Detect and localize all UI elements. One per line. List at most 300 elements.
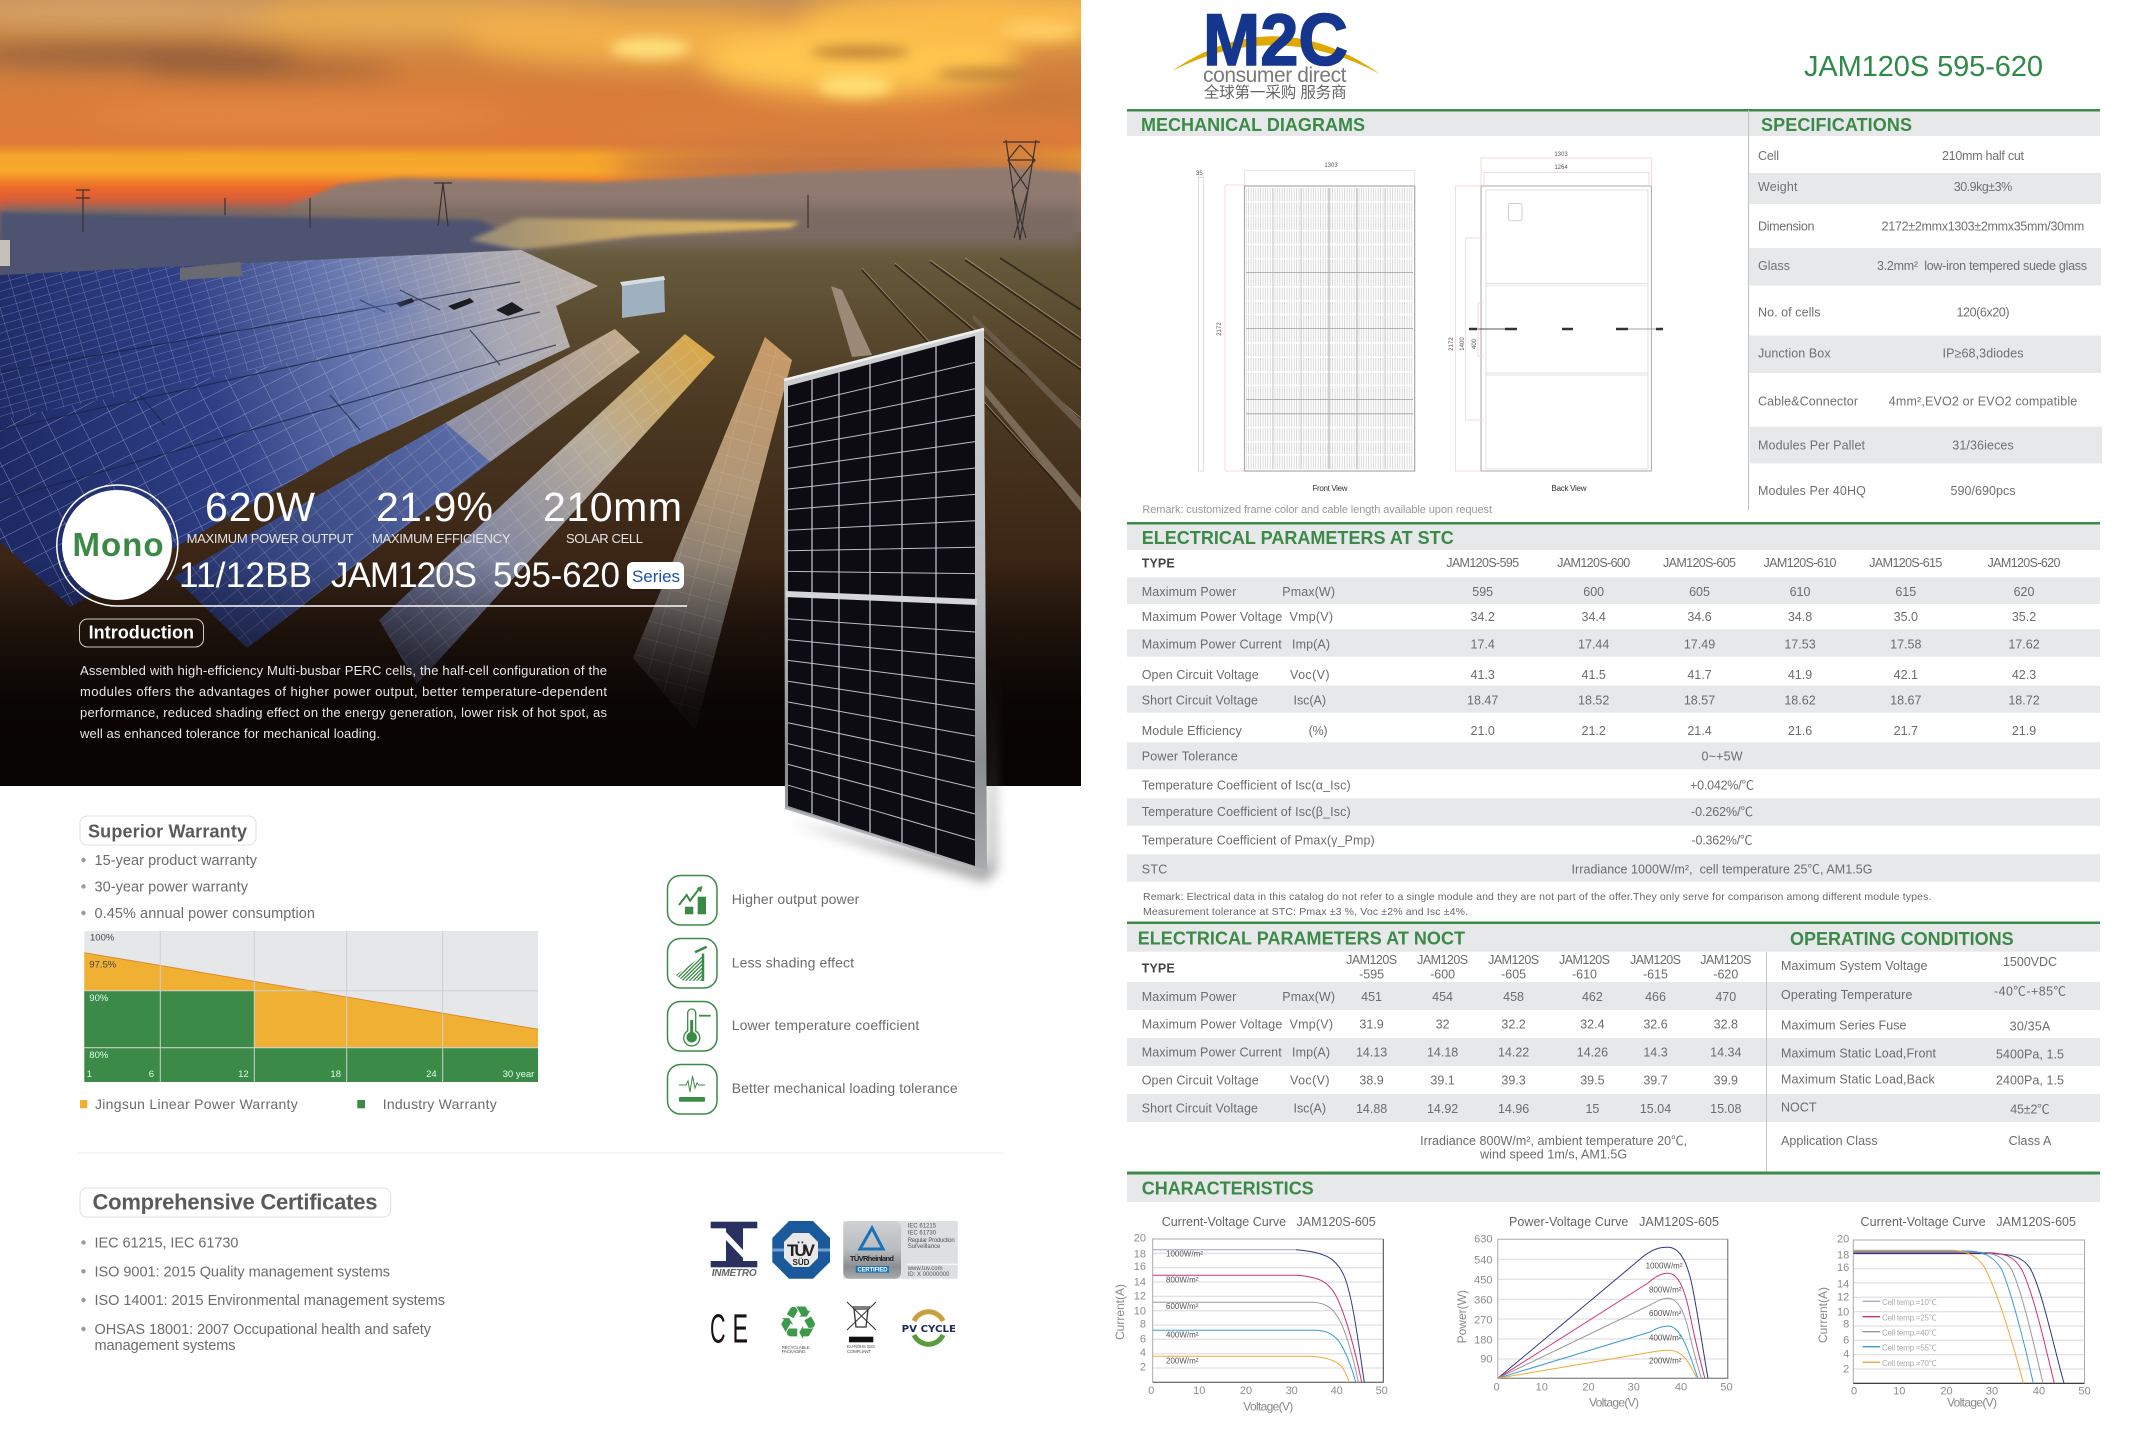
section header: characteristics [1127, 1172, 2100, 1202]
chart: power-voltage curve by irradiance: 450 [1474, 1274, 1492, 1286]
STC short circuit voltage: 18.57 [1684, 693, 1715, 707]
back view drawing [1449, 152, 1663, 493]
section header: electrical parameters at STC [1127, 522, 2100, 550]
specifications table: Glass [1758, 259, 1790, 273]
NOCT type row: -595 [1359, 967, 1384, 981]
chart: current-voltage curve by irradiance: 12 [1134, 1290, 1146, 1302]
specifications table: 4mm²,EVO2 or EVO2 compatible [1889, 394, 2077, 408]
NOCT conditions note: wind speed 1m/s, AM1.5G [1479, 1147, 1627, 1161]
STC short circuit voltage [1127, 686, 2100, 713]
NOCT short circuit voltage: Isc(A) [1294, 1102, 1326, 1116]
chart: current-voltage curve by irradiance [1113, 1215, 1388, 1414]
NOCT maximum power: 458 [1503, 990, 1524, 1004]
NOCT type row: -610 [1572, 967, 1597, 981]
STC power tolerance [1127, 742, 2100, 769]
section header: mechanical diagrams [1127, 109, 2100, 136]
chart: current-voltage curve by irradiance: 400W/m² [1166, 1330, 1199, 1339]
certificate bullets: ISO 14001: 2015 Environmental management systems [94, 1293, 445, 1309]
STC maximum power current: Maximum Power Current [1142, 637, 1282, 651]
NOCT maximum power current: Imp(A) [1292, 1046, 1330, 1060]
chart: current-voltage curve by irradiance: 14 [1134, 1276, 1146, 1288]
STC open circuit voltage: 42.3 [2012, 668, 2036, 682]
STC short circuit voltage: 18.52 [1578, 693, 1609, 707]
introduction text: modules offers the advantages of higher power output, better temperature-dependent [80, 684, 607, 699]
warranty area chart: 24 [426, 1069, 437, 1080]
chart: current-voltage curve by cell temperature [1816, 1215, 2091, 1410]
STC maximum power voltage [1142, 610, 2036, 624]
NOCT maximum power voltage: Vmp(V) [1290, 1018, 1333, 1032]
specifications table [1749, 149, 2102, 498]
chart: current-voltage curve by cell temperature: Cell temp.=10℃ [1882, 1298, 1937, 1307]
back view drawing: Back View [1552, 484, 1587, 493]
section header: electrical parameters at NOCT and operating conditions: OPERATING CONDITIONS [1790, 929, 2014, 949]
NOCT open circuit voltage: 39.9 [1714, 1073, 1738, 1087]
STC short circuit voltage: 18.62 [1784, 693, 1816, 707]
specifications table: 2172±2mmx1303±2mmx35mm/30mm [1882, 220, 2084, 234]
STC maximum power current: 17.44 [1578, 637, 1609, 651]
warranty area chart: 100% [90, 933, 115, 944]
NOCT maximum power voltage: 32.4 [1580, 1018, 1605, 1032]
operating conditions table: NOCT [1781, 1101, 1817, 1115]
STC module efficiency: 21.4 [1687, 724, 1712, 738]
chart: current-voltage curve by cell temperature: 30 [1986, 1385, 1998, 1397]
STC maximum power: 615 [1895, 585, 1916, 599]
NOCT open circuit voltage: Voc(V) [1290, 1073, 1330, 1087]
chart: current-voltage curve by irradiance: Current-Voltage Curve JAM120S-605 [1162, 1215, 1376, 1229]
back view drawing: 2172 [1449, 337, 1455, 351]
superior warranty heading [80, 816, 256, 845]
chart: current-voltage curve by cell temperature: Cell temp.=40℃ [1882, 1328, 1937, 1338]
introduction text: performance, reduced shading effect on the energy generation, lower risk of hot spot, as [80, 705, 608, 720]
chart: current-voltage curve by cell temperature: 0 [1851, 1385, 1857, 1397]
STC maximum power: 605 [1689, 585, 1710, 599]
key stat: 21.9%: 21.9% [376, 484, 493, 530]
STC short circuit voltage: 18.47 [1467, 693, 1498, 707]
superior warranty heading: Superior Warranty [88, 822, 247, 842]
key stat: 21.9% [372, 484, 511, 546]
STC maximum power: Pmax(W) [1282, 585, 1335, 599]
STC type row: JAM120S-615 [1869, 556, 1942, 570]
specifications table: IP≥68,3diodes [1942, 346, 2024, 360]
chart: current-voltage curve by cell temperature: 14 [1837, 1278, 1849, 1290]
logo: CE mark: C [710, 1306, 726, 1352]
STC temperature coefficient alpha: Temperature Coefficient of Isc(α_Isc) [1142, 778, 1351, 792]
front view drawing: 1303 [1324, 163, 1338, 169]
chart: current-voltage curve by cell temperature: 50 [2078, 1385, 2091, 1397]
front view drawing: 2172 [1217, 322, 1223, 336]
NOCT maximum power current: Maximum Power Current [1142, 1046, 1282, 1060]
logo: PV CYCLE: PV CYCLE [902, 1324, 956, 1335]
logo: recyclable packaging: RECYCLABLE [782, 1345, 810, 1350]
chart: power-voltage curve by irradiance: 10 [1536, 1382, 1548, 1394]
specifications table: 31/36ieces [1952, 439, 2014, 453]
chart: current-voltage curve by irradiance: 4 [1140, 1347, 1146, 1359]
chart: current-voltage curve by cell temperature: Cell temp.=70℃ [1882, 1359, 1937, 1368]
feature: better mechanical loading tolerance: Better mechanical loading tolerance [732, 1080, 958, 1096]
chart legend: Industry Warranty [383, 1096, 497, 1112]
STC temperature coefficient gamma: -0.362%/℃ [1692, 833, 1752, 847]
chart: power-voltage curve by irradiance: 600W/m² [1649, 1309, 1682, 1318]
back view drawing: 400 [1472, 338, 1478, 349]
NOCT type row [1142, 953, 1751, 981]
warranty area chart: 18 [330, 1069, 341, 1080]
front view drawing: 35 [1196, 171, 1203, 177]
chart: current-voltage curve by irradiance: 10 [1193, 1385, 1205, 1397]
STC temperature coefficient gamma [1142, 833, 1752, 847]
section header: characteristics: CHARACTERISTICS [1142, 1178, 1314, 1198]
STC open circuit voltage: 41.5 [1582, 668, 1606, 682]
NOCT short circuit voltage: 14.96 [1498, 1102, 1529, 1116]
certificate bullets [81, 1235, 445, 1354]
logo: TUV Rheinland: www.tuv.com [907, 1266, 943, 1272]
background photo: solar farm at sunset [0, 0, 1160, 786]
STC module efficiency: 21.7 [1894, 724, 1918, 738]
section header: electrical parameters at NOCT and operating conditions [1127, 922, 2100, 952]
key stat: 620W: MAXIMUM POWER OUTPUT [187, 531, 354, 546]
specifications table: Modules Per 40HQ [1758, 484, 1866, 498]
STC maximum power current: 17.62 [2008, 637, 2040, 651]
chart: current-voltage curve by cell temperature: 16 [1837, 1262, 1849, 1274]
operating conditions table: Application Class [1781, 1134, 1878, 1148]
section header: electrical parameters at NOCT and operating conditions: ELECTRICAL PARAMETERS AT NOCT [1138, 928, 1465, 948]
NOCT open circuit voltage: Open Circuit Voltage [1142, 1073, 1259, 1087]
STC maximum power current: 17.49 [1684, 637, 1715, 651]
feature: better mechanical loading tolerance [668, 1064, 958, 1114]
chart: power-voltage curve by irradiance: 540 [1474, 1254, 1492, 1266]
panel shadow [790, 660, 996, 882]
chart: current-voltage curve by irradiance: 1000W/m² [1166, 1250, 1203, 1259]
feature: lower temperature coefficient: Lower temperature coefficient [732, 1017, 919, 1033]
NOCT type row: TYPE [1142, 962, 1175, 976]
series tag: Series [632, 567, 680, 586]
chart: current-voltage curve by irradiance: 800W/m² [1166, 1275, 1199, 1284]
chart legend: Jingsun Linear Power Warranty [95, 1096, 298, 1112]
introduction heading [80, 619, 204, 647]
chart: current-voltage curve by irradiance: Current(A) [1113, 1284, 1127, 1340]
specifications table: No. of cells [1758, 306, 1820, 320]
logo: TUV Rheinland: IEC 61730 [908, 1231, 937, 1237]
chart: power-voltage curve by irradiance: 360 [1474, 1294, 1492, 1306]
operating conditions table: 45±2℃ [2010, 1102, 2050, 1116]
chart: current-voltage curve by irradiance: 2 [1140, 1362, 1146, 1374]
STC type row: JAM120S-595 [1446, 556, 1519, 570]
chart: current-voltage curve by cell temperature: 12 [1837, 1292, 1849, 1304]
logo: INMETRO: INMETRO [712, 1268, 757, 1279]
NOCT short circuit voltage: 14.88 [1356, 1102, 1387, 1116]
STC temperature coefficient beta: Temperature Coefficient of Isc(β_Isc) [1142, 805, 1351, 819]
chart: power-voltage curve by irradiance: 630 [1474, 1234, 1492, 1246]
STC short circuit voltage: Isc(A) [1294, 693, 1326, 707]
STC maximum power current: Imp(A) [1292, 637, 1330, 651]
STC maximum power: 600 [1583, 585, 1604, 599]
STC short circuit voltage: 18.72 [2008, 693, 2040, 707]
STC type row: JAM120S-620 [1988, 556, 2061, 570]
NOCT maximum power voltage: 32.2 [1501, 1018, 1526, 1032]
STC temperature coefficient beta [1127, 798, 2100, 826]
NOCT type row: JAM120S [1417, 953, 1468, 967]
STC remark: Measurement tolerance at STC: Pmax ±3 %, Voc ±2% and Isc ±4%. [1143, 906, 1468, 918]
comprehensive certificates heading: Comprehensive Certificates [92, 1190, 378, 1215]
chart: power-voltage curve by irradiance: 20 [1582, 1382, 1595, 1394]
chart: current-voltage curve by irradiance: 8 [1140, 1318, 1146, 1330]
chart: current-voltage curve by cell temperature: 10 [1893, 1385, 1905, 1397]
STC temperature coefficient alpha: +0.042%/℃ [1690, 778, 1754, 792]
operating conditions table: Class A [2009, 1134, 2052, 1148]
STC maximum power voltage: Maximum Power Voltage [1142, 610, 1282, 624]
chart: power-voltage curve by irradiance: 800W/m² [1649, 1285, 1682, 1294]
chart: power-voltage curve by irradiance: 400W/m² [1649, 1334, 1682, 1343]
NOCT type row: -605 [1501, 967, 1526, 981]
product name heading: 11/12BB [179, 556, 312, 595]
logo: recyclable packaging: ♻ [778, 1296, 819, 1350]
section header: mechanical diagrams: MECHANICAL DIAGRAMS [1141, 115, 1365, 135]
chart: power-voltage curve by irradiance: 0 [1493, 1382, 1500, 1394]
product name heading [179, 556, 620, 595]
chart: current-voltage curve by irradiance: 20 [1240, 1385, 1252, 1397]
NOCT maximum power current [1127, 1038, 2100, 1066]
chart: current-voltage curve by cell temperature: 2 [1843, 1363, 1849, 1375]
warranty area chart: 6 [149, 1069, 154, 1080]
logo: WEEE crossed bin: COMPLIANT [847, 1349, 871, 1354]
chart: current-voltage curve by irradiance: 40 [1331, 1385, 1343, 1397]
warranty area chart: 97.5% [89, 960, 117, 971]
logo: TUV Rheinland: CERTIFIED [858, 1268, 888, 1274]
STC open circuit voltage: 42.1 [1894, 668, 1918, 682]
NOCT type row: JAM120S [1700, 953, 1751, 967]
NOCT maximum power: 462 [1582, 990, 1603, 1004]
chart: current-voltage curve by cell temperature: 4 [1843, 1348, 1849, 1360]
STC maximum power: Maximum Power [1142, 585, 1236, 599]
STC maximum power voltage: 35.2 [2012, 610, 2036, 624]
NOCT maximum power: 466 [1645, 990, 1666, 1004]
chart: current-voltage curve by irradiance: 600W/m² [1166, 1302, 1199, 1311]
NOCT conditions note [1420, 1134, 1687, 1161]
specifications table: Weight [1758, 180, 1798, 194]
STC maximum power voltage: 34.2 [1471, 610, 1495, 624]
introduction text [79, 663, 608, 741]
chart: power-voltage curve by irradiance: 180 [1474, 1334, 1492, 1346]
STC maximum power [1127, 577, 2100, 604]
STC maximum power voltage: 34.8 [1788, 610, 1812, 624]
NOCT open circuit voltage: 39.7 [1643, 1073, 1668, 1087]
specifications table: Dimension [1758, 220, 1814, 234]
chart: power-voltage curve by irradiance: 200W/m² [1649, 1356, 1682, 1365]
chart: current-voltage curve by irradiance: 20 [1134, 1233, 1146, 1245]
feature: less shading effect: Less shading effect [732, 954, 854, 970]
chart legend [80, 1096, 497, 1112]
operating conditions table: 5400Pa, 1.5 [1996, 1048, 2064, 1062]
operating conditions table: 2400Pa, 1.5 [1996, 1074, 2064, 1088]
STC short circuit voltage: 18.67 [1890, 693, 1921, 707]
STC open circuit voltage: 41.3 [1471, 668, 1495, 682]
NOCT maximum power: 451 [1361, 990, 1382, 1004]
NOCT open circuit voltage: 39.1 [1430, 1073, 1455, 1087]
STC module efficiency: 21.2 [1582, 724, 1606, 738]
STC power tolerance: 0~+5W [1702, 750, 1743, 764]
key stat: 620W [187, 484, 354, 546]
STC open circuit voltage: 41.9 [1788, 668, 1812, 682]
section header: electrical parameters at STC: ELECTRICAL PARAMETERS AT STC [1142, 528, 1454, 548]
chart: current-voltage curve by cell temperature: 6 [1843, 1334, 1849, 1346]
NOCT maximum power: Pmax(W) [1282, 990, 1335, 1004]
operating conditions table [1781, 955, 2066, 1148]
chart: current-voltage curve by irradiance: 18 [1134, 1248, 1146, 1260]
back view drawing: 1264 [1554, 165, 1568, 171]
logo: PV CYCLE [902, 1312, 956, 1344]
operating conditions table: Maximum Static Load,Back [1781, 1072, 1935, 1086]
logo: TUV SUD [772, 1221, 830, 1279]
STC short circuit voltage: Short Circuit Voltage [1142, 693, 1258, 707]
warranty area chart: 1 [87, 1069, 92, 1080]
NOCT maximum power current: 14.13 [1356, 1046, 1387, 1060]
logo: TUV Rheinland [843, 1221, 958, 1279]
STC maximum power voltage: 34.6 [1687, 610, 1712, 624]
chart: current-voltage curve by cell temperature: Cell temp.=25℃ [1882, 1314, 1937, 1322]
specifications table: 210mm half cut [1942, 149, 2025, 163]
STC maximum power current: 17.53 [1784, 637, 1816, 651]
key stat: 210mm: 210mm [543, 484, 682, 530]
logo: TUV Rheinland: Regular Production [908, 1238, 955, 1244]
solar module product image [784, 329, 987, 871]
STC module efficiency: 21.6 [1788, 724, 1812, 738]
chart: current-voltage curve by irradiance: 10 [1134, 1305, 1146, 1317]
chart: current-voltage curve by irradiance: 30 [1286, 1385, 1298, 1397]
warranty bullets [81, 853, 315, 922]
M2C consumer direct logo [1172, 0, 1380, 102]
STC maximum power current: 17.58 [1890, 637, 1921, 651]
warranty area chart: 90% [89, 993, 109, 1004]
warranty area chart: 80% [89, 1050, 109, 1061]
warranty bullets: 30-year power warranty [94, 880, 249, 896]
M2C consumer direct logo: consumer direct [1203, 64, 1347, 87]
certificate bullets: OHSAS 18001: 2007 Occupational health and safety [94, 1322, 432, 1338]
STC open circuit voltage [1142, 668, 2036, 682]
NOCT open circuit voltage [1142, 1073, 1738, 1087]
certificate bullets: ISO 9001: 2015 Quality management systems [94, 1264, 390, 1280]
STC conditions row: Irradiance 1000W/m², cell temperature 25℃, AM1.5G [1572, 862, 1872, 876]
STC temperature coefficient beta: -0.262%/℃ [1691, 805, 1753, 819]
logo: CE mark: E [732, 1306, 748, 1352]
chart: current-voltage curve by cell temperature: 20 [1940, 1385, 1953, 1397]
warranty area chart [84, 931, 538, 1082]
warranty area chart: 12 [238, 1069, 249, 1080]
logo: WEEE crossed bin [847, 1302, 876, 1354]
NOCT maximum power: 454 [1432, 990, 1453, 1004]
NOCT maximum power current: 14.22 [1498, 1046, 1529, 1060]
section header: specifications: SPECIFICATIONS [1761, 115, 1912, 135]
specifications table: 120(6x20) [1956, 306, 2010, 320]
NOCT open circuit voltage: 39.5 [1580, 1073, 1605, 1087]
STC module efficiency: Module Efficiency [1142, 724, 1242, 738]
logo: WEEE crossed bin: EU-ROHS SSS [847, 1344, 875, 1349]
front view drawing [1196, 163, 1415, 493]
operating conditions table: Maximum System Voltage [1781, 959, 1928, 973]
NOCT short circuit voltage [1127, 1094, 2100, 1122]
chart: power-voltage curve by irradiance: 270 [1474, 1314, 1492, 1326]
NOCT maximum power current: 14.3 [1643, 1046, 1668, 1060]
chart: current-voltage curve by irradiance: 200W/m² [1166, 1356, 1199, 1365]
chart: current-voltage curve by irradiance: 16 [1134, 1261, 1146, 1273]
STC open circuit voltage: Voc(V) [1290, 668, 1330, 682]
product name heading: 595-620 [493, 556, 620, 595]
STC temperature coefficient gamma: Temperature Coefficient of Pmax(γ_Pmp) [1142, 833, 1375, 847]
NOCT type row: JAM120S [1488, 953, 1539, 967]
M2C consumer direct logo: M2C [1203, 0, 1348, 81]
STC table [1127, 556, 2100, 882]
logo: recyclable packaging: PACKAGING [782, 1349, 806, 1354]
chart: power-voltage curve by irradiance: 30 [1628, 1382, 1640, 1394]
chart: current-voltage curve by irradiance: Voltage(V) [1243, 1400, 1293, 1414]
NOCT maximum power voltage: 31.9 [1359, 1018, 1384, 1032]
mono badge: circle and ring: Mono [72, 526, 164, 563]
logo: TUV SUD: SÜD [793, 1258, 810, 1267]
warranty bullets: 15-year product warranty [94, 853, 258, 869]
chart: current-voltage curve by cell temperature: 40 [2033, 1385, 2045, 1397]
NOCT short circuit voltage: 15.04 [1640, 1102, 1671, 1116]
NOCT maximum power current: 14.26 [1577, 1046, 1608, 1060]
series tag [627, 562, 684, 589]
feature: higher output power: Higher output power [732, 891, 860, 907]
STC maximum power current [1127, 629, 2100, 657]
specifications table: 30.9kg±3% [1954, 180, 2012, 194]
NOCT maximum power: 470 [1715, 990, 1736, 1004]
STC maximum power current: 17.4 [1471, 637, 1495, 651]
STC maximum power: 610 [1790, 585, 1810, 599]
chart: current-voltage curve by irradiance: 6 [1140, 1333, 1146, 1345]
model title: JAM120S 595-620 [1804, 51, 2043, 83]
STC conditions row [1127, 854, 2100, 882]
STC open circuit voltage: 41.7 [1687, 668, 1712, 682]
chart: current-voltage curve by cell temperature: Current-Voltage Curve JAM120S-605 [1860, 1215, 2076, 1229]
STC maximum power voltage: 35.0 [1894, 610, 1918, 624]
chart: power-voltage curve by irradiance: 90 [1480, 1354, 1492, 1366]
STC conditions row: STC [1142, 862, 1167, 876]
back view drawing: 1303 [1554, 152, 1568, 158]
chart: power-voltage curve by irradiance: Power-Voltage Curve JAM120S-605 [1509, 1215, 1719, 1229]
key stat: 210mm: SOLAR CELL [566, 531, 643, 546]
chart: current-voltage curve by cell temperature: 10 [1837, 1307, 1849, 1319]
operating conditions table: -40℃-+85℃ [1994, 985, 2066, 999]
STC module efficiency: (%) [1309, 724, 1328, 738]
feature: less shading effect [668, 938, 854, 988]
M2C consumer direct logo: 全球第一采购 服务商 [1204, 84, 1347, 102]
chart: current-voltage curve by cell temperature: 8 [1843, 1319, 1849, 1331]
logo: TUV Rheinland: IEC 61215 [908, 1224, 937, 1230]
chart: power-voltage curve by irradiance: Voltage(V) [1589, 1396, 1639, 1410]
NOCT type row: JAM120S [1559, 953, 1610, 967]
STC maximum power: 595 [1472, 585, 1493, 599]
STC module efficiency: 21.9 [2012, 724, 2036, 738]
chart: power-voltage curve by irradiance: 50 [1720, 1382, 1733, 1394]
NOCT table [1127, 953, 2100, 1161]
chart: current-voltage curve by cell temperature: 20 [1837, 1234, 1849, 1246]
NOCT maximum power voltage: 32.8 [1714, 1018, 1738, 1032]
NOCT maximum power voltage: 32.6 [1643, 1018, 1668, 1032]
chart: current-voltage curve by cell temperature: 18 [1837, 1249, 1849, 1261]
front view drawing: Front View [1312, 484, 1348, 493]
STC power tolerance: Power Tolerance [1142, 750, 1238, 764]
NOCT type row: -600 [1430, 967, 1455, 981]
specifications table: Cable&Connector [1758, 394, 1858, 408]
specifications table: 590/690pcs [1950, 484, 2016, 498]
NOCT conditions note: Irradiance 800W/m², ambient temperature 20℃, [1420, 1134, 1687, 1148]
chart: current-voltage curve by irradiance: 50 [1376, 1385, 1388, 1397]
operating conditions table: Operating Temperature [1781, 988, 1912, 1002]
logo: INMETRO [711, 1222, 757, 1279]
STC open circuit voltage: Open Circuit Voltage [1142, 668, 1259, 682]
chart: current-voltage curve by irradiance: 0 [1148, 1385, 1154, 1397]
mono badge: circle and ring [57, 485, 687, 606]
